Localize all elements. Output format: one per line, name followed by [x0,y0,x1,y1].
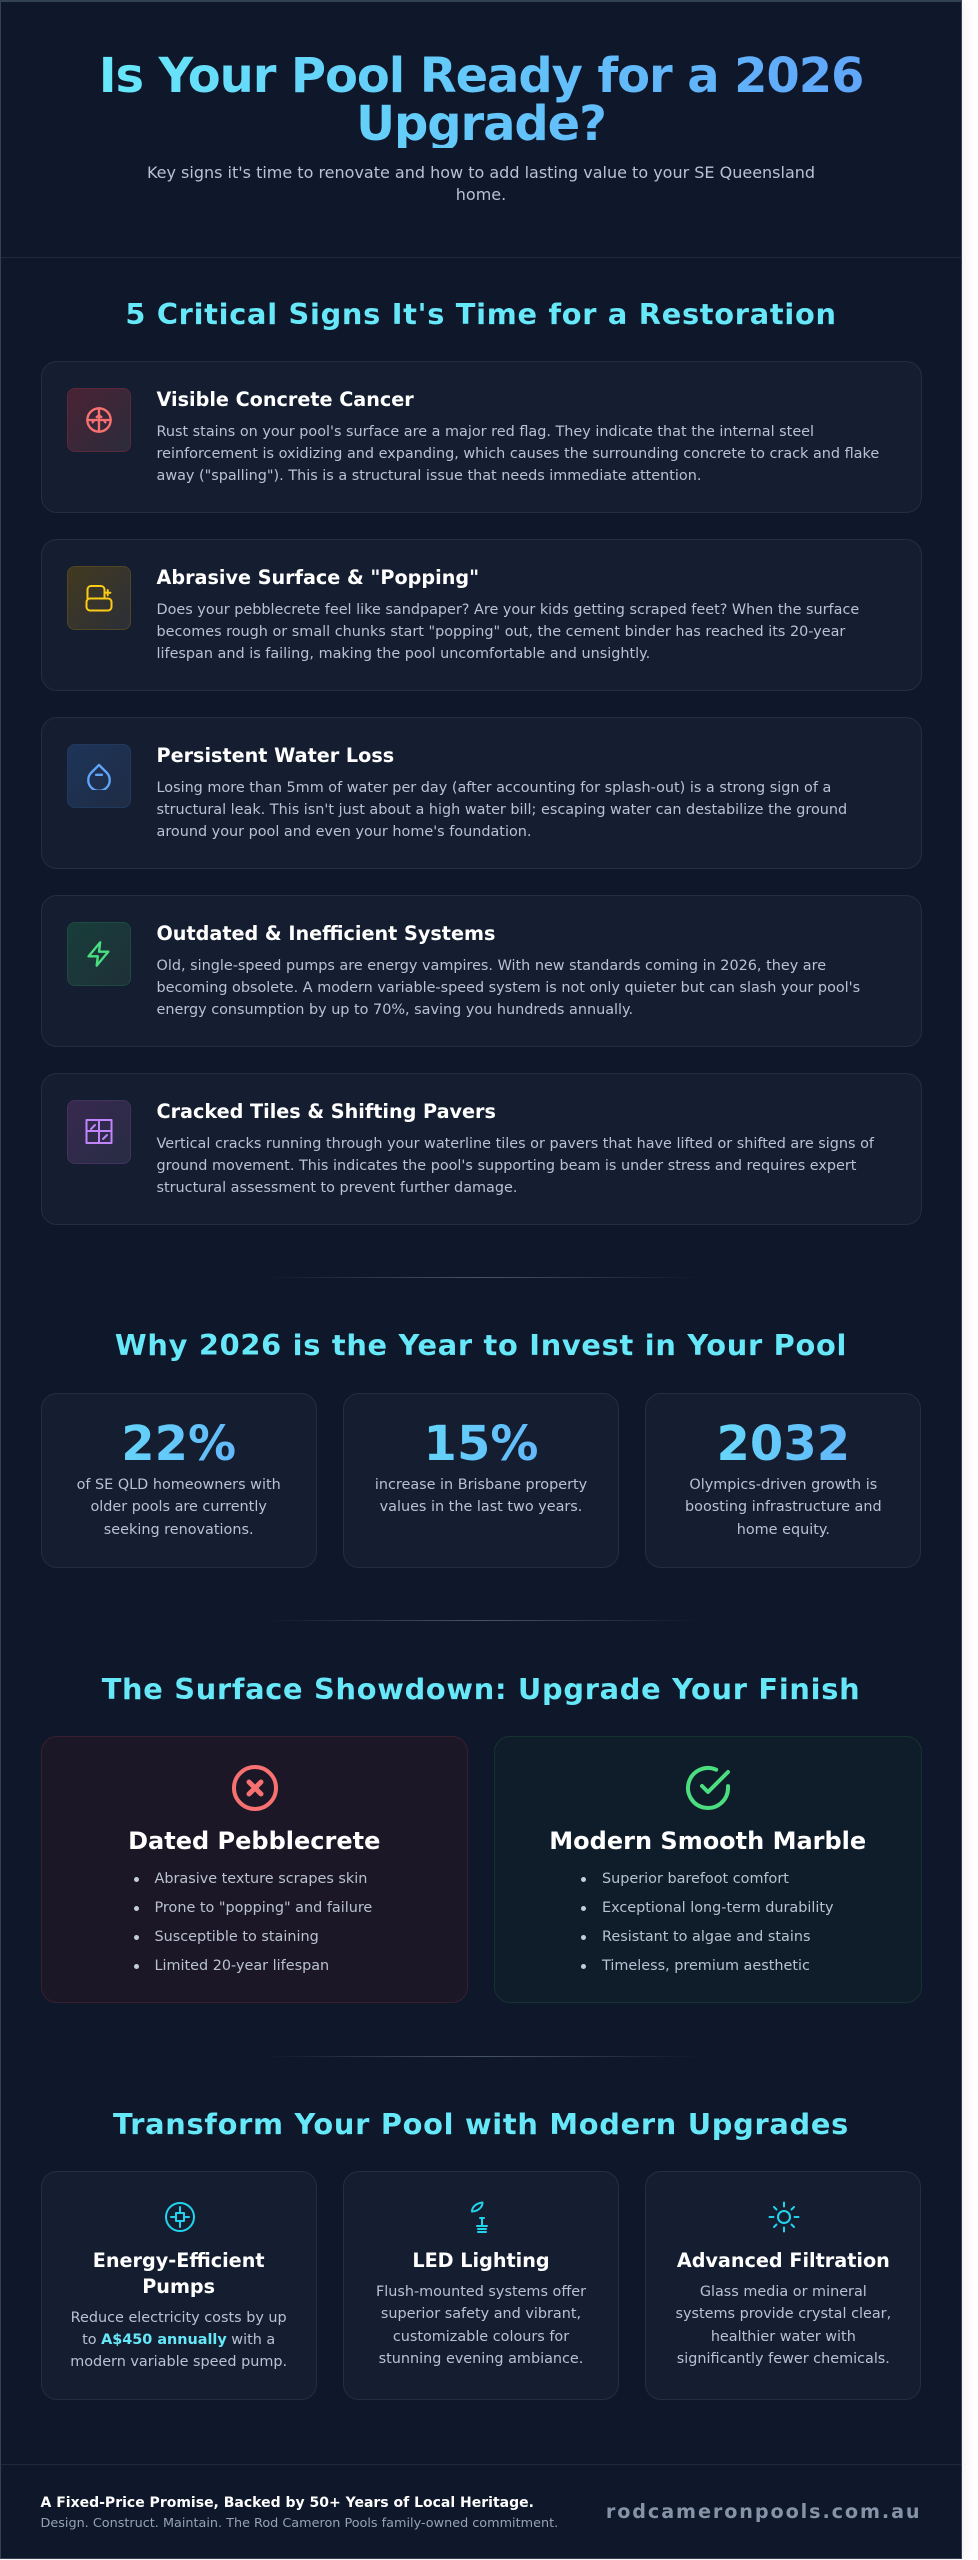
sign description: becoming obsolete. A modern variable-speed system is not only quieter but can slash your pool's [156,980,860,996]
sign title: Outdated & Inefficient Systems [156,922,495,945]
upgrade title: Advanced Filtration [677,2249,890,2272]
upgrade title: Energy-Efficient [93,2249,265,2272]
sign description: Rust stains on your pool's surface are a major red flag. They indicate that the internal steel [156,424,814,440]
stat caption [77,1477,281,1538]
footer promise: A Fixed-Price Promise, Backed by 50+ Years of Local Heritage. [40,2494,534,2510]
sign description [156,958,860,1018]
panel title: Modern Smooth Marble [549,1826,866,1854]
sign title: Cracked Tiles & Shifting Pavers [156,1100,496,1123]
upgrade description: Reduce electricity costs by up [71,2310,287,2326]
panel: energy-efficient pumps [40,2171,317,2400]
upgrade description: healthier water with [711,2329,856,2345]
sign title: Visible Concrete Cancer [156,388,414,411]
title [94,52,868,148]
stat number: 15% [424,1416,538,1472]
stat caption: boosting infrastructure and [685,1499,882,1515]
sign description: away ("spalling"). This is a structural issue that needs immediate attention. [156,468,701,484]
stat caption: of SE QLD homeowners with [77,1477,281,1493]
upgrade description [70,2310,287,2370]
feature list [134,1870,372,1974]
stat caption: values in the last two years. [380,1499,582,1515]
upgrade title [93,2249,265,2298]
upgrade description: Flush-mounted systems offer [376,2284,586,2300]
stat caption: seeking renovations. [104,1522,254,1538]
panel: sign 4 outdated systems [40,895,922,1047]
upgrade description: superior safety and vibrant, [381,2306,581,2322]
stat number [42,1415,316,1473]
icon: LED lamp [471,2202,488,2233]
upgrade description: systems provide crystal clear, [675,2306,891,2322]
upgrade description: modern variable speed pump. [70,2354,287,2370]
sign description: structural assessment to prevent further damage. [156,1180,517,1196]
feature list: Exceptional long-term durability [602,1900,834,1916]
feature list: Superior barefoot comfort [602,1870,789,1886]
stat caption [375,1477,587,1515]
upgrade description [675,2284,891,2367]
sign title: Abrasive Surface & "Popping" [156,566,479,589]
upgrade description [376,2284,586,2367]
feature list [581,1870,834,1974]
subtitle: home. [456,185,506,204]
sign title: Persistent Water Loss [156,744,394,767]
feature list: Susceptible to staining [154,1928,319,1944]
sign description: energy consumption by up to 70%, saving you hundreds annually. [156,1002,633,1018]
panel: sign 1 concrete cancer [40,361,922,513]
heading: why 2026: Why 2026 is the Year to Invest in Your Pool [115,1328,847,1362]
sign description: Vertical cracks running through your waterline tiles or pavers that have lifted or shifted are signs of [156,1136,874,1152]
feature list: Limited 20-year lifespan [154,1958,329,1974]
sign description [156,1136,874,1196]
heading: 5 critical signs: 5 Critical Signs It's Time for a Restoration [125,297,837,331]
sign description: around your pool and even your home's foundation. [156,824,531,840]
heading: surface showdown: The Surface Showdown: Upgrade Your Finish [102,1672,860,1706]
stat caption: increase in Brisbane property [375,1477,587,1493]
icon: lightning bolt [66,922,130,986]
sign description [156,602,859,662]
icon: cracked tiles [66,1100,130,1164]
footer tagline: Design. Construct. Maintain. The Rod Cameron Pools family-owned commitment. [40,2516,558,2530]
upgrade description: significantly fewer chemicals. [677,2351,890,2367]
sign description: Losing more than 5mm of water per day (after accounting for splash-out) is a strong sign of a [156,780,831,796]
stat number [646,1415,920,1473]
sign description: Does your pebblecrete feel like sandpaper? Are your kids getting scraped feet? When the surface [156,602,859,618]
panel: dated pebblecrete [40,1736,468,2003]
title: Upgrade? [356,96,606,152]
sign description: becomes rough or small chunks start "popping" out, the cement binder has reached its 20-year [156,624,845,640]
stat number [344,1415,618,1473]
feature list: Timeless, premium aesthetic [602,1958,810,1974]
panel: modern smooth marble [494,1736,922,2003]
sign description: reinforcement is oxidizing and expanding, which causes the surrounding concrete to crack and flake [156,446,879,462]
panel: sign 3 water loss [40,717,922,869]
feature list: Abrasive texture scrapes skin [154,1870,367,1886]
header [1,0,961,258]
panel: advanced filtration [645,2171,921,2400]
feature list: Resistant to algae and stains [602,1928,810,1944]
stat number: 2032 [717,1416,850,1472]
panel title: Dated Pebblecrete [128,1826,380,1854]
panel: stat 2032 [645,1393,921,1568]
icon: cross circle [232,1765,278,1811]
feature list: Prone to "popping" and failure [154,1900,372,1916]
panel: LED lighting [343,2171,619,2400]
sign description [156,780,847,840]
stat caption [685,1477,882,1538]
subtitle [147,163,815,204]
sign description: Old, single-speed pumps are energy vampires. With new standards coming in 2026, they are [156,958,826,974]
stat caption: Olympics-driven growth is [689,1477,877,1493]
sign description [156,424,879,484]
upgrade description: customizable colours for [393,2329,569,2345]
stat number: 22% [121,1416,236,1472]
upgrade description: Glass media or mineral [700,2284,867,2300]
sign description: ground movement. This indicates the pool's supporting beam is under stress and requires expert [156,1158,856,1174]
subtitle: Key signs it's time to renovate and how to add lasting value to your SE Queensland [147,163,815,182]
panel: stat 22% [40,1393,317,1568]
panel: sign 5 cracked tiles [40,1073,922,1225]
stat caption: home equity. [737,1522,830,1538]
website url: rodcameronpools.com.au [606,2500,922,2523]
icon: water drop [66,744,130,808]
icon: concrete cancer [66,388,130,452]
icon: check circle [686,1766,730,1810]
panel: stat 15% [343,1393,619,1568]
stat caption: older pools are currently [90,1499,267,1515]
upgrade description: to A$450 annually with a [82,2332,275,2348]
upgrade title: Pumps [142,2275,215,2298]
heading: modern upgrades: Transform Your Pool with Modern Upgrades [113,2107,849,2141]
title: Is Your Pool Ready for a 2026 [99,48,863,104]
upgrade description: stunning evening ambiance. [379,2351,583,2367]
icon: abrasive surface [66,566,130,630]
icon: sun [768,2202,800,2232]
sign description: lifespan and is failing, making the pool uncomfortable and unsightly. [156,646,650,662]
icon: pump [165,2202,195,2232]
upgrade title: LED Lighting [412,2249,550,2272]
footer [1,2464,961,2559]
panel: sign 2 abrasive surface [40,539,922,691]
sign description: structural leak. This isn't just about a high water bill; escaping water can destabilize the ground [156,802,847,818]
